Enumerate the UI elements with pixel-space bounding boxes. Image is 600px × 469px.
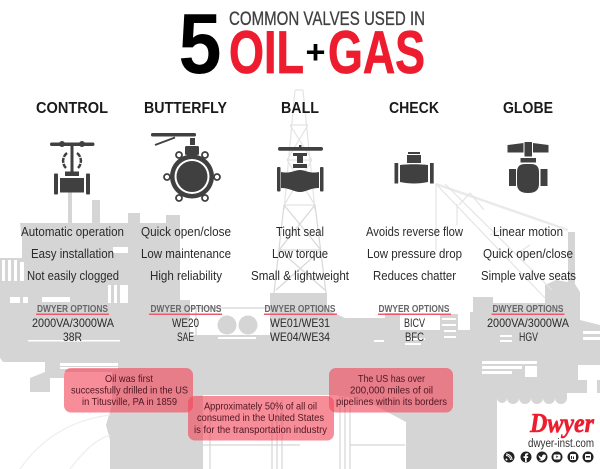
heading: ball: BALL (281, 100, 319, 117)
features: control (21, 225, 124, 283)
logo: dwyer: Dwyer (529, 408, 594, 438)
callout: pipeline miles (329, 368, 453, 412)
dwyer options: butterfly (149, 303, 222, 344)
features: globe (481, 225, 576, 283)
column: ball valve (251, 100, 349, 344)
dwyer options: ball: DWYER OPTIONS (264, 303, 336, 315)
dwyer options: butterfly: WE20 (172, 316, 199, 330)
features: check (366, 225, 464, 283)
dwyer options: ball: WE04/WE34 (270, 330, 330, 344)
features: butterfly: Low maintenance (141, 247, 231, 261)
icon: ball valve (277, 145, 324, 192)
features: control: Not easily clogged (27, 269, 119, 283)
features: ball (251, 225, 349, 283)
title line: oil + gas: + (306, 34, 326, 70)
callout: transportation share: Approximately 50% of all oil (204, 400, 317, 412)
callout: first oil drilling (64, 368, 193, 412)
dwyer options: control: 2000VA/3000WA (32, 316, 114, 330)
heading: control: CONTROL (36, 100, 108, 117)
callout: transportation share (188, 396, 334, 440)
callout: first oil drilling: Oil was first (105, 373, 153, 385)
features: butterfly: Quick open/close (141, 225, 231, 239)
dwyer options: globe: HGV (519, 330, 538, 344)
features: ball: Tight seal (276, 225, 324, 239)
features: ball: Low torque (272, 247, 328, 261)
heading: check: CHECK (389, 100, 440, 117)
title line: common valves used in: COMMON VALVES USED IN (229, 9, 425, 30)
column: control valve (21, 100, 124, 344)
heading: globe: GLOBE (503, 100, 553, 117)
title (178, 0, 425, 92)
dwyer options: check (378, 303, 451, 344)
icon: globe valve (508, 142, 548, 193)
column: globe valve (481, 100, 576, 344)
dwyer options: control (32, 303, 114, 344)
heading: butterfly: BUTTERFLY (144, 100, 228, 117)
dwyer options: check: BICV (404, 316, 425, 330)
features: control: Automatic operation (21, 225, 124, 239)
dwyer options: control: DWYER OPTIONS (37, 303, 108, 315)
callout: pipeline miles: 200,000 miles of oil (350, 384, 433, 396)
dwyer options: globe: DWYER OPTIONS (492, 303, 564, 315)
features: check: Low pressure drop (367, 247, 462, 261)
title line: oil + gas: OIL (229, 19, 304, 86)
dwyer options: globe: 2000VA/3000WA (487, 316, 569, 330)
callout: transportation share: is for the transportation industry (194, 424, 328, 436)
dwyer options: check: BFC (405, 330, 424, 344)
callout: first oil drilling: in Titusville, PA in 1859 (82, 396, 177, 408)
features: globe: Simple valve seats (481, 269, 576, 283)
features: check: Reduces chatter (373, 269, 456, 283)
dwyer options: control: 38R (63, 330, 82, 344)
social media icons (504, 452, 594, 462)
column: butterfly valve (141, 100, 231, 344)
features: butterfly: High reliability (150, 269, 223, 283)
features: butterfly (141, 225, 231, 283)
callout: pipeline miles: pipelines within its borders (336, 396, 447, 408)
features: globe: Quick open/close (483, 247, 573, 261)
callout: pipeline miles: The US has over (358, 373, 425, 385)
dwyer options: globe (487, 303, 569, 344)
features: control: Easy installation (31, 247, 114, 261)
features: globe: Linear motion (493, 225, 563, 239)
features: ball: Small & lightweight (251, 269, 349, 283)
callout: transportation share: consumed in the United States (197, 412, 324, 424)
callout: first oil drilling: successfully drilled in the US (71, 384, 188, 396)
features: check: Avoids reverse flow (366, 225, 464, 239)
icon: butterfly valve (151, 133, 220, 201)
title line: oil + gas: GAS (328, 19, 425, 86)
column: check valve (366, 100, 464, 344)
title line: oil + gas (229, 19, 425, 86)
dwyer options: check: DWYER OPTIONS (378, 303, 450, 315)
dwyer options: butterfly: SAE (177, 330, 194, 344)
icon: control valve (50, 141, 94, 194)
icon: check valve (394, 152, 434, 184)
dwyer options: ball: WE01/WE31 (270, 316, 330, 330)
dwyer options: butterfly: DWYER OPTIONS (150, 303, 222, 315)
dwyer options: ball (264, 303, 337, 344)
